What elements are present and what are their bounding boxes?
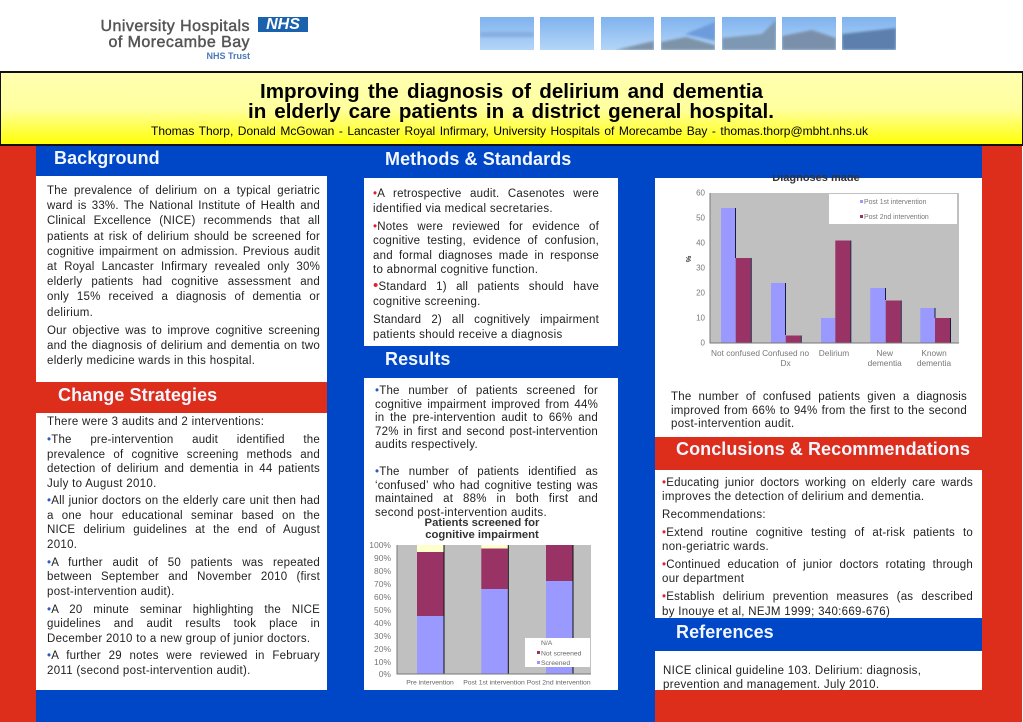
reference text: [663, 664, 921, 690]
heading: References: [655, 618, 982, 650]
results bullet 2: [375, 466, 598, 518]
strategy bullet 2: [47, 495, 320, 550]
panel: background: [36, 176, 327, 382]
results bullet 1: [375, 385, 598, 451]
strategy bullet 2: •All junior doctors on the elderly care unit then had: [47, 495, 320, 507]
background paragraph 2: elderly medicine wards in this hospital.: [47, 355, 255, 367]
strategy bullet 1: July to August 2010.: [47, 478, 157, 490]
recommendation bullet 3: [662, 591, 973, 618]
standard 1: •Standard 1) all patients should have: [373, 276, 599, 294]
panel: results: [364, 378, 618, 690]
strategy bullet 1: prevalence of cognitive screening methods and: [47, 448, 320, 460]
results bullet 1: •The number of patients screened for: [375, 385, 598, 397]
background paragraph 1: only 15% received a diagnosis of dementia or: [47, 291, 320, 303]
strategies intro: There were 3 audits and 2 interventions:: [47, 416, 264, 428]
grouped bar chart: diagnoses made: 40: [696, 238, 706, 248]
logo: University Hospitals of Morecambe Bay NHS Trust: of Morecambe Bay: [109, 34, 250, 50]
conclusion bullet 1: improves the detection of delirium and dementia.: [662, 491, 924, 503]
strategy bullet 3: [47, 556, 320, 598]
panel: references: [655, 650, 982, 690]
chart caption: [671, 391, 967, 430]
results bullet 1: in the pre-intervention audit to 66% and: [375, 412, 598, 424]
panel: methods and standards: [364, 178, 618, 346]
stacked bar chart: patients screened for cognitive impairment: Patients screened for: [425, 517, 540, 529]
stacked bar chart: patients screened for cognitive impairment: 100%: [369, 540, 391, 550]
standard 2: [373, 314, 599, 341]
stacked bar chart: patients screened for cognitive impairment: 10%: [374, 657, 391, 667]
results bullet 2: •The number of patients identified as: [375, 466, 598, 478]
logo: University Hospitals of Morecambe Bay NHS Trust: University Hospitals: [101, 18, 250, 35]
stacked bar chart: patients screened for cognitive impairment: N/A: [541, 640, 553, 647]
background paragraph 2: and the diagnosis of delirium and dementia on two: [47, 340, 320, 352]
heading: Change Strategies: [36, 382, 327, 413]
recommendation bullet 1: [662, 526, 973, 553]
authors and affiliation: Thomas Thorp, Donald McGowan - Lancaster Royal Infirmary, University Hospitals of Morecambe Bay - thomas.thorp@mbht.nhs.uk: [151, 124, 868, 138]
grouped bar chart: diagnoses made: 50: [696, 214, 706, 222]
stacked bar chart: patients screened for cognitive impairment: 0%: [379, 669, 391, 679]
strategy bullet 3: •A further audit of 50 patients was repeated: [47, 556, 320, 568]
strategy bullet 4: guidelines and audit results took place in: [47, 618, 320, 630]
stacked bar chart: patients screened for cognitive impairment: Post 2nd intervention: [527, 680, 591, 686]
stacked bar chart: patients screened for cognitive impairment: 30%: [374, 631, 391, 641]
stacked bar chart: patients screened for cognitive impairment: 40%: [374, 618, 391, 628]
strategy bullet 3: between September and November 2010 (first: [47, 571, 320, 583]
methods bullet 2: and formal diagnoses made in response: [373, 250, 599, 262]
standard 2: patients should receive a diagnosis: [373, 329, 563, 341]
heading: Conclusions & Recommendations: Conclusions & Recommendations: [676, 439, 970, 459]
grouped bar chart: diagnoses made: 0: [701, 338, 706, 348]
methods bullet 2: cognitive testing, evidence of confusion,: [373, 235, 599, 247]
heading: Change Strategies: Change Strategies: [58, 385, 217, 405]
panel: diagnoses made chart: [655, 178, 982, 437]
recommendations label: Recommendations:: [662, 509, 766, 521]
grouped bar chart: diagnoses made: %: [684, 256, 693, 263]
banner photo strip: mountain landscape: [480, 17, 896, 50]
standard 1: [373, 276, 599, 308]
title line 1: Improving the diagnosis of delirium and dementia: [260, 80, 763, 103]
methods bullet 1: [373, 188, 599, 214]
grouped bar chart: diagnoses made: Not confused: [711, 348, 760, 358]
strategy bullet 1: detection of delirium and dementia in 44 patients: [47, 463, 320, 475]
results bullet 2: maintained at 88% in both first and: [375, 493, 598, 505]
grouped bar chart: diagnoses made: Confused no: [762, 348, 810, 358]
logo: University Hospitals of Morecambe Bay NHS Trust: [101, 16, 308, 61]
grouped bar chart: diagnoses made: Delirium: [819, 348, 849, 358]
chart caption: The number of confused patients given a diagnosis: [671, 391, 967, 403]
results bullet 2: ‘confused’ who had cognitive testing was: [375, 480, 598, 492]
background paragraph 1: elderly patients had cognitive assessment and: [47, 276, 320, 288]
stacked bar chart: patients screened for cognitive impairment: [369, 517, 591, 686]
background paragraph 1: [47, 185, 320, 319]
grouped bar chart: diagnoses made: New: [876, 348, 894, 358]
grouped bar chart: diagnoses made: Post 2nd intervention: [864, 214, 929, 221]
standard 1: cognitive screening.: [373, 296, 481, 308]
stacked bar chart: patients screened for cognitive impairment: Pre intervention: [406, 680, 454, 686]
background paragraph 1: ward is 33%. The National Institute of Health and: [47, 200, 320, 212]
grouped bar chart: diagnoses made: Post 1st intervention: [864, 199, 927, 206]
logo: University Hospitals of Morecambe Bay NHS Trust: NHS Trust: [206, 51, 250, 61]
heading: Conclusions & Recommendations: [655, 437, 982, 470]
stacked bar chart: patients screened for cognitive impairment: 50%: [374, 605, 391, 615]
recommendation bullet 1: non-geriatric wards.: [662, 541, 769, 553]
heading: Methods & Standards: Methods & Standards: [385, 149, 571, 169]
logo: University Hospitals of Morecambe Bay NHS Trust: NHS: [266, 16, 300, 33]
grouped bar chart: diagnoses made: 10: [696, 314, 706, 322]
stacked bar chart: patients screened for cognitive impairment: Not screened: [541, 650, 582, 658]
strategy bullet 4: [47, 604, 320, 645]
strategy bullet 5: [47, 650, 320, 677]
conclusion bullet 1: •Educating junior doctors working on elderly care wards: [662, 476, 973, 488]
background paragraph 2: Our objective was to improve cognitive screening: [47, 325, 320, 337]
strategy bullet 5: •A further 29 notes were reviewed in February: [47, 650, 320, 662]
background paragraph 1: cognitive impairment on admission. Previous audit: [47, 246, 320, 258]
conclusion bullet 1: [662, 476, 973, 503]
background paragraph 1: The prevalence of delirium on a typical geriatric: [47, 185, 320, 197]
grouped bar chart: diagnoses made: 60: [696, 188, 706, 198]
background paragraph 1: Clinical Excellence (NICE) recommends that all: [47, 215, 320, 227]
strategy bullet 4: •A 20 minute seminar highlighting the NICE: [47, 604, 320, 616]
methods bullet 2: [373, 220, 599, 276]
reference text: NICE clinical guideline 103. Delirium: diagnosis,: [663, 664, 921, 676]
methods bullet 2: •Notes were reviewed for evidence of: [373, 220, 599, 232]
background paragraph 1: patients at risk of delirium should be screened for: [47, 231, 320, 243]
strategy bullet 4: December 2010 to a new group of junior doctors.: [47, 633, 310, 645]
panel: conclusions and recommendations: [655, 470, 982, 618]
grouped bar chart: diagnoses made: [684, 175, 959, 368]
strategy bullet 1: [47, 434, 320, 490]
strategy bullet 1: •The pre-intervention audit identified the: [47, 434, 320, 446]
chart caption: post-intervention audit.: [671, 418, 795, 430]
background paragraph 1: at Royal Lancaster Infirmary revealed only 30%: [47, 261, 320, 273]
grouped bar chart: diagnoses made: dementia: [868, 358, 902, 368]
methods bullet 1: identified via medical secretaries.: [373, 202, 553, 214]
stacked bar chart: patients screened for cognitive impairment: 90%: [374, 553, 391, 563]
grouped bar chart: diagnoses made: Dx: [781, 358, 792, 368]
stacked bar chart: patients screened for cognitive impairment: 60%: [374, 592, 391, 602]
stacked bar chart: patients screened for cognitive impairment: cognitive impairment: [425, 529, 539, 541]
recommendation bullet 3: •Establish delirium prevention measures (as described: [662, 591, 973, 603]
methods bullet 1: •A retrospective audit. Casenotes were: [373, 188, 599, 200]
background paragraph 2: [47, 325, 320, 367]
results bullet 1: audits respectively.: [375, 439, 478, 451]
methods bullet 2: to abnormal cognitive function.: [373, 264, 538, 276]
title banner: [0, 71, 1023, 146]
stacked bar chart: patients screened for cognitive impairment: 70%: [374, 579, 391, 589]
stacked bar chart: patients screened for cognitive impairment: 20%: [374, 644, 391, 654]
panel: change strategies: [36, 413, 327, 690]
grouped bar chart: diagnoses made: 30: [696, 264, 706, 272]
chart caption: improved from 66% to 94% from the first to the second: [671, 405, 967, 417]
strategy bullet 2: a one hour educational seminar based on the: [47, 510, 320, 522]
stacked bar chart: patients screened for cognitive impairment: Post 1st intervention: [463, 680, 525, 686]
results bullet 1: 72% in first and second post-intervention: [375, 426, 598, 438]
grouped bar chart: diagnoses made: dementia: [917, 358, 951, 368]
heading: References: References: [676, 622, 774, 642]
recommendation bullet 2: •Continued education of junior doctors rotating through: [662, 558, 973, 570]
recommendation bullet 3: by Inouye et al, NEJM 1999; 340:669-676): [662, 606, 890, 618]
grouped bar chart: diagnoses made: 20: [696, 288, 706, 298]
stacked bar chart: patients screened for cognitive impairment: 80%: [374, 566, 391, 576]
recommendation bullet 2: our department: [662, 573, 744, 585]
strategy bullet 5: 2011 (second post-intervention audit).: [47, 665, 251, 677]
recommendation bullet 2: [662, 558, 973, 585]
heading: Results: Results: [385, 349, 451, 369]
standard 2: Standard 2) all cognitively impairment: [373, 314, 599, 326]
stacked bar chart: patients screened for cognitive impairment: Screened: [541, 660, 570, 667]
results bullet 1: cognitive impairment improved from 44%: [375, 398, 598, 410]
recommendation bullet 1: •Extend routine cognitive testing of at-risk patients to: [662, 526, 973, 538]
strategy bullet 2: 2010.: [47, 538, 77, 550]
title line 2: in elderly care patients in a district general hospital.: [248, 100, 774, 123]
strategy bullet 3: post-intervention audit).: [47, 586, 175, 598]
results bullet 2: second post-intervention audits.: [375, 506, 547, 518]
strategy bullet 2: NICE delirium guidelines at the end of August: [47, 524, 320, 536]
red and blue poster background: [0, 146, 1022, 722]
grouped bar chart: diagnoses made: Known: [921, 348, 947, 358]
heading: Background: Background: [54, 148, 160, 168]
background paragraph 1: delirium.: [47, 307, 93, 319]
